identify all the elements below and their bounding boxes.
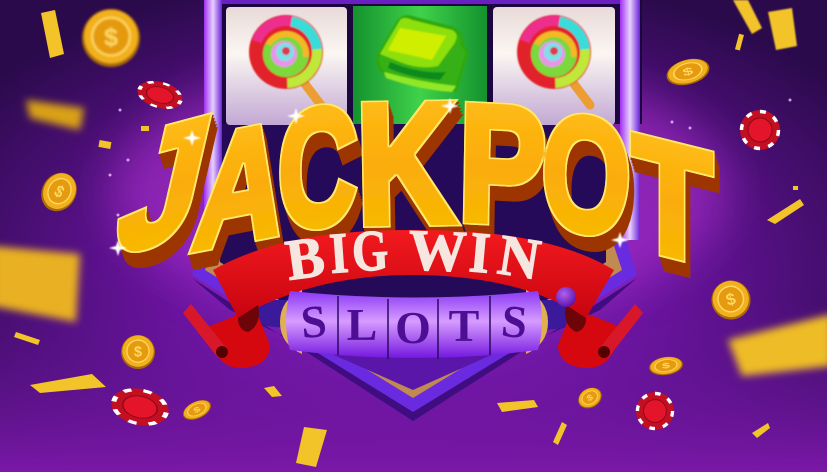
right reel: [493, 7, 615, 125]
lever ball: [556, 287, 576, 307]
barrel caps: [280, 290, 302, 354]
right pillar: [620, 0, 640, 240]
title: JACKPOT: K: [355, 67, 456, 260]
title: JACKPOT: [103, 67, 712, 300]
icon: right lollipop: [514, 12, 594, 105]
top bar: [222, 0, 620, 4]
sparkles on title: [109, 98, 629, 256]
background bottom glow: [0, 300, 827, 472]
text: SLOTS: S: [299, 295, 329, 348]
background sparkle dots: [108, 98, 792, 216]
title: JACKPOT: O: [539, 78, 634, 271]
title: JACKPOT: J: [103, 79, 225, 291]
barrel separators: [338, 296, 490, 359]
barrel backing band: [240, 300, 590, 345]
text: BIG WIN: B: [282, 225, 328, 293]
title: JACKPOT: A: [186, 87, 297, 285]
text: BIG WIN: N: [494, 223, 544, 292]
shield outer band: [192, 236, 637, 412]
icon: green candy: [378, 17, 467, 92]
text: BIG WIN: I: [467, 220, 493, 285]
text: BIG WIN: [282, 217, 544, 293]
text: BIG WIN: I: [327, 222, 350, 286]
title: JACKPOT: P: [457, 70, 547, 259]
shield gold band: [205, 240, 622, 398]
slot machine frame: [204, 0, 642, 240]
ribbon: big win: [183, 217, 643, 368]
text: SLOTS: L: [347, 299, 377, 350]
left pillar: [204, 0, 222, 240]
ribbon right tail: [558, 304, 643, 368]
background centre glow: [110, 60, 730, 320]
barrel body: [286, 291, 542, 358]
text: SLOTS: O: [395, 302, 431, 353]
poker chips: [108, 76, 780, 431]
text: SLOTS: [299, 295, 529, 353]
ribbon band: [213, 230, 614, 318]
text: SLOTS: T: [449, 300, 479, 351]
slots barrel: [280, 287, 576, 359]
title: JACKPOT: C: [276, 71, 359, 263]
left reel: [226, 7, 347, 125]
ribbon fold shadows: [238, 305, 259, 332]
text: BIG WIN: G: [350, 218, 390, 284]
title: JACKPOT: T: [632, 101, 712, 300]
shield inner: [220, 110, 606, 386]
text: BIG WIN: W: [408, 217, 468, 284]
green reel: [353, 6, 487, 124]
blurred gold bars: [0, 100, 827, 376]
shield lower fill: [300, 340, 525, 390]
text: SLOTS: S: [499, 295, 529, 348]
shield shadow: [192, 278, 637, 421]
coins: [34, 9, 755, 424]
icon: left lollipop: [246, 12, 326, 105]
ribbon left tail: [183, 304, 270, 368]
